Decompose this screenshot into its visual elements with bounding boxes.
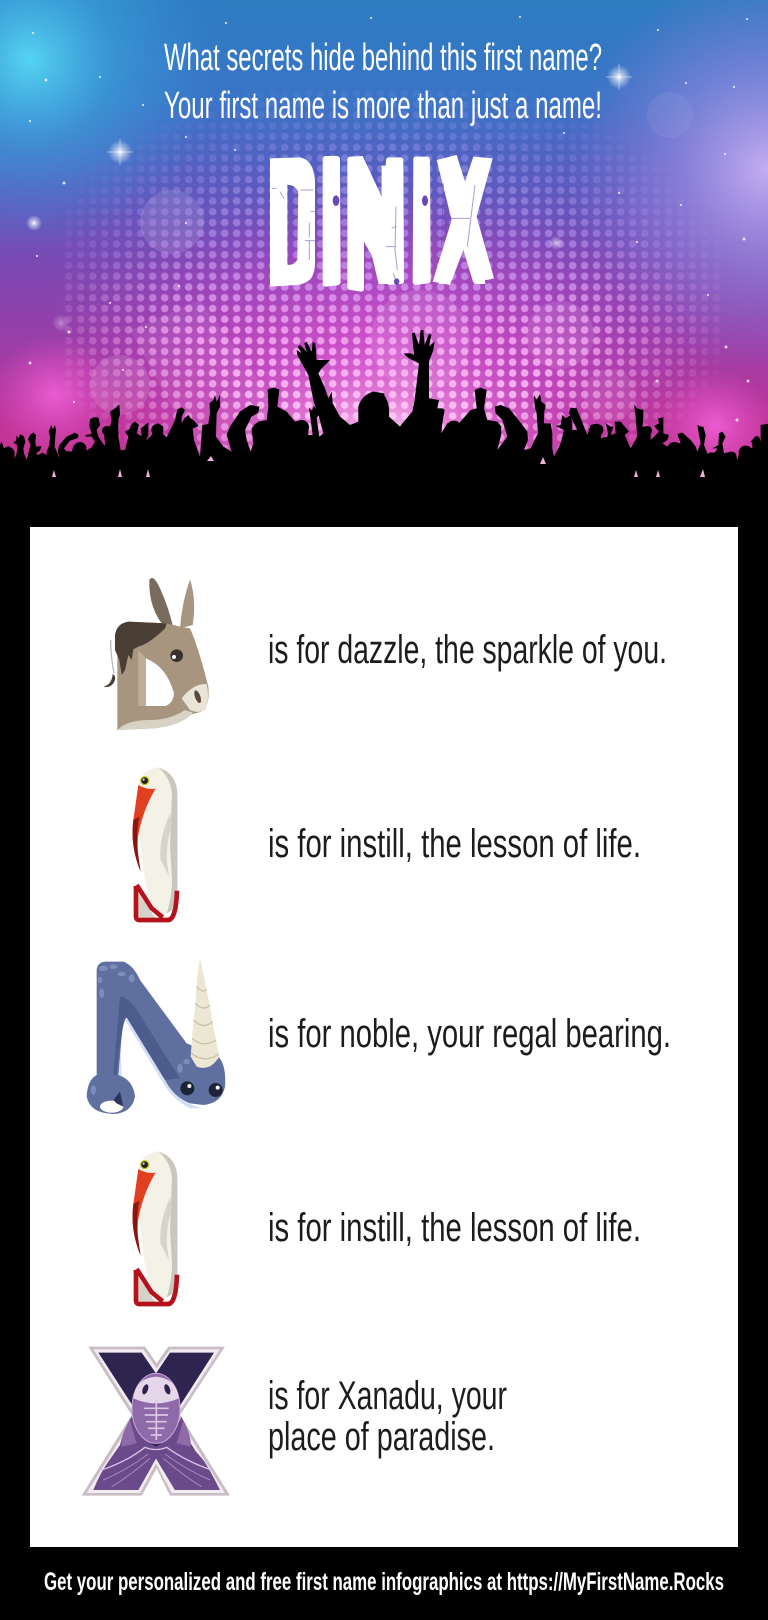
- text: letter X: [268, 1374, 507, 1459]
- panel: letter meanings: [30, 527, 738, 1547]
- icon: trilobite letter X: [82, 1347, 230, 1496]
- crowd silhouette: [0, 330, 768, 620]
- text: letter I (repeat): is for instill, the lesson of life.: [268, 1206, 641, 1250]
- icon: narwhal letter N: [87, 958, 225, 1114]
- text: letter I: is for instill, the lesson of life.: [268, 822, 641, 866]
- stars: [28, 16, 750, 422]
- sparkles: [26, 64, 632, 332]
- dot matrix: [60, 90, 720, 490]
- name title: DINIX: DINIX: [265, 129, 486, 321]
- background: stage lights: [0, 0, 768, 500]
- text: letter X: place of paradise.: [268, 1415, 495, 1459]
- icon: stork letter I: [133, 767, 177, 920]
- text: letter X: is for Xanadu, your: [268, 1374, 507, 1418]
- icon: stork letter I (repeat): [133, 1151, 177, 1304]
- icon: donkey letter D: [103, 578, 209, 730]
- headline: [164, 37, 602, 127]
